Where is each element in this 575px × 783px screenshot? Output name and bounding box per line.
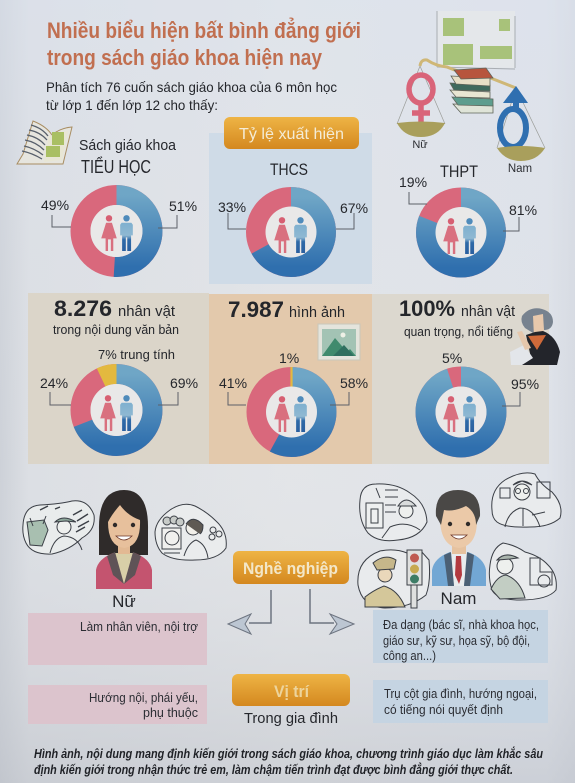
donut chart: important characters 5/95: 5% bbox=[442, 350, 462, 366]
illustration: man bbox=[432, 490, 486, 586]
stat: 7.987 images: 7.987 bbox=[228, 297, 284, 322]
stat: 7.987 images bbox=[228, 297, 345, 322]
donut chart: primary 49/51: 49% bbox=[41, 197, 69, 213]
heading: upper secondary: THPT bbox=[440, 162, 478, 181]
stat: 100% important characters: 100% bbox=[399, 296, 455, 321]
donut chart: characters 24/7/69: 7% trung tính bbox=[98, 347, 175, 362]
text box: female position: Hướng nội, phái yếu, bbox=[89, 690, 198, 705]
icon: policeman and traffic light sketch bbox=[358, 550, 430, 608]
panel: important characters bbox=[372, 294, 549, 464]
donut chart: images 41/1/58: 1% bbox=[279, 350, 299, 366]
donut chart: important characters 5/95 bbox=[426, 350, 539, 448]
text box: male occupation: Đa dạng (bác sĩ, nhà khoa học, bbox=[383, 617, 539, 632]
illustration: scale with books and gender symbols bbox=[397, 11, 545, 175]
donut chart: upper secondary 19/81: 81% bbox=[509, 202, 537, 218]
heading: lower secondary: THCS bbox=[270, 160, 308, 179]
illustration: woman bbox=[96, 490, 152, 589]
stat: 100% important characters: nhân vật bbox=[461, 303, 516, 320]
icon: mechanic sketch bbox=[489, 543, 556, 600]
panel: images bbox=[209, 294, 372, 464]
male symbol bbox=[500, 86, 528, 147]
text box: female position bbox=[28, 685, 207, 724]
text box: female position: phụ thuộc bbox=[143, 705, 198, 720]
stat: 8.276 characters: nhân vật bbox=[118, 303, 176, 320]
stat: 8.276 characters bbox=[53, 296, 179, 337]
donut chart: characters 24/7/69 bbox=[40, 347, 198, 446]
donut chart: upper secondary 19/81 bbox=[399, 174, 537, 268]
text box: male position: có tiếng nói quyết định bbox=[384, 702, 503, 717]
donut chart: important characters 5/95: 95% bbox=[511, 376, 539, 392]
text box: male occupation: giáo sư, kỹ sư, họa sỹ, bộ đội, bbox=[383, 633, 530, 648]
title: Nhiều biểu hiện bất bình đẳng giới bbox=[47, 18, 361, 43]
intro text: từ lớp 1 đến lớp 12 cho thấy: bbox=[46, 97, 218, 113]
donut chart: lower secondary 33/67: 67% bbox=[340, 200, 368, 216]
donut chart: upper secondary 19/81: 19% bbox=[399, 174, 427, 190]
icon: picture frame bbox=[318, 324, 360, 360]
text box: male occupation: công an...) bbox=[383, 648, 436, 663]
heading: primary school: TIỂU HỌC bbox=[81, 156, 151, 177]
donut chart: images 41/1/58: 41% bbox=[219, 375, 247, 391]
stat: 7.987 images: hình ảnh bbox=[289, 304, 345, 321]
button: occupation bbox=[233, 551, 349, 584]
book stack bbox=[450, 68, 493, 113]
icon: market seller sketch bbox=[155, 504, 226, 560]
button: position: Vị trí bbox=[274, 682, 310, 701]
panel: characters in text bbox=[28, 293, 209, 464]
panel: THCS appearance rate column bbox=[209, 133, 372, 284]
donut chart: images 41/1/58 bbox=[219, 350, 368, 447]
button: occupation: Nghề nghiệp bbox=[243, 559, 338, 578]
scale beam bbox=[420, 60, 516, 88]
arrow: to male bbox=[310, 589, 354, 634]
stat: 8.276 characters: 8.276 bbox=[54, 296, 112, 321]
icon: engineer sketch bbox=[360, 484, 427, 541]
open book bbox=[437, 11, 515, 69]
icon: doctor sketch bbox=[492, 473, 561, 527]
stat: 100% important characters: quan trọng, nổi tiếng bbox=[404, 325, 513, 339]
donut chart: lower secondary 33/67 bbox=[218, 197, 368, 267]
text box: female occupation: Làm nhân viên, nội trợ bbox=[80, 619, 198, 634]
button: position bbox=[232, 674, 350, 706]
text box: male position: Trụ cột gia đình, hướng ngoại, bbox=[384, 686, 537, 701]
female symbol bbox=[409, 75, 433, 123]
label: female: Nữ bbox=[112, 592, 136, 611]
text box: male position bbox=[373, 680, 548, 723]
button: appearance rate bbox=[224, 117, 359, 149]
scale labels: Nữ bbox=[412, 139, 428, 151]
donut chart: primary 49/51 bbox=[41, 195, 197, 267]
heading: textbook label: Sách giáo khoa bbox=[79, 137, 177, 154]
stat: 8.276 characters: trong nội dung văn bản bbox=[53, 322, 179, 337]
icon: farmer sketch bbox=[23, 501, 94, 554]
label: in the family: Trong gia đình bbox=[244, 710, 338, 727]
donut chart: primary 49/51: 51% bbox=[169, 198, 197, 214]
donut chart: characters 24/7/69: 69% bbox=[170, 375, 198, 391]
text box: female occupation bbox=[28, 613, 207, 665]
scale pans bbox=[397, 122, 445, 137]
intro text bbox=[46, 79, 337, 113]
conclusion text: định kiến giới trong nhận thức trẻ em, làm chậm tiến trình đạt được bình đẳng giới thực chất. bbox=[34, 762, 513, 777]
icon: textbook bbox=[17, 121, 72, 164]
arrow: to female bbox=[228, 590, 271, 634]
donut chart: characters 24/7/69: 24% bbox=[40, 375, 68, 391]
illustration: scale with books and gender symbols: Nam bbox=[508, 163, 532, 175]
donut chart: lower secondary 33/67: 33% bbox=[218, 199, 246, 215]
intro text: Phân tích 76 cuốn sách giáo khoa của 6 môn học bbox=[46, 79, 337, 95]
label: male: Nam bbox=[441, 589, 476, 608]
stat: 100% important characters bbox=[399, 296, 516, 339]
button: appearance rate: Tỷ lệ xuất hiện bbox=[239, 126, 344, 143]
title: trong sách giáo khoa hiện nay bbox=[47, 45, 323, 70]
icon: famous composer bbox=[510, 308, 560, 365]
title bbox=[47, 18, 361, 70]
donut chart: images 41/1/58: 58% bbox=[340, 375, 368, 391]
conclusion text bbox=[34, 746, 543, 777]
text box: male occupation bbox=[373, 610, 548, 663]
